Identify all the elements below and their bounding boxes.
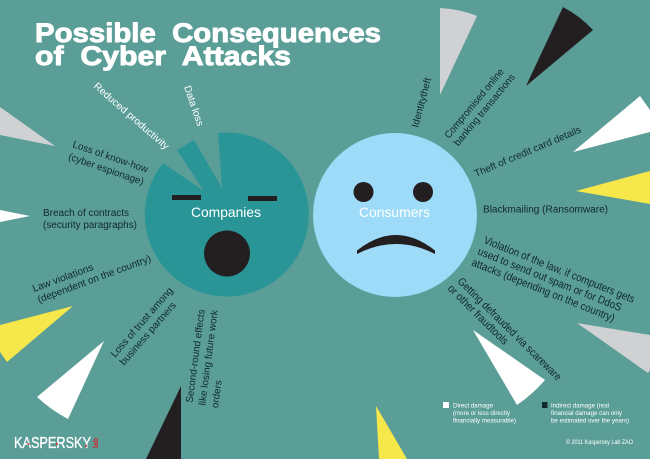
legend: indirect damage: Indirect damage (real: [551, 402, 609, 410]
label: violation of the law: used to send out spam or for DdoS: [476, 246, 623, 314]
label: loss of trust: Loss of trust among: [109, 286, 176, 360]
consumers label: Consumers: [359, 204, 430, 220]
label: breach of contracts: (security paragraphs): [43, 220, 137, 231]
logo: kaspersky lab: KASPERSKY: [14, 435, 91, 452]
label: loss of trust: business partners: [118, 300, 179, 368]
wedge: black top: [526, 7, 593, 86]
label: data loss: Data loss: [181, 84, 205, 128]
sad mouth: [357, 235, 435, 254]
open mouth: [204, 230, 250, 276]
panel: consumers face: [313, 133, 477, 297]
left eye: [354, 182, 374, 202]
legend: direct damage: financially measurable): [453, 418, 516, 424]
label: breach of contracts: [43, 208, 137, 231]
label: breach of contracts: Breach of contracts: [43, 208, 129, 219]
logo: kaspersky lab: lab: [93, 438, 100, 448]
label: reduced productivity: Reduced productivity: [91, 81, 171, 152]
wedge: white bottom-left: [37, 341, 104, 419]
consumers head: [313, 133, 477, 297]
label: violation of the law: attacks (depending on the country): [470, 257, 616, 325]
left eyebrow: [172, 195, 201, 200]
wedge: grey right: [577, 323, 650, 373]
legend: indirect damage: [542, 402, 629, 424]
label: law violations: Law violations: [31, 262, 95, 295]
wedge: yellow bottom: [376, 406, 407, 459]
wedge: grey top-left: [0, 107, 55, 146]
legend: direct damage: Direct damage: [453, 402, 494, 410]
label: second-round effects: Second-round effects: [185, 309, 208, 403]
wedge: yellow right: [576, 171, 650, 204]
label: blackmailing: Blackmailing (Ransomware): [483, 204, 608, 216]
label: second-round effects: [184, 307, 234, 409]
label: loss of know-how: (cyber espionage): [67, 152, 145, 188]
wedge: black bottom: [146, 386, 181, 459]
copyright: © 2011 Kaspersky Lab ZAO: [566, 439, 633, 446]
label: second-round effects: orders: [210, 380, 225, 409]
legend: indirect damage: financial damage can only: [551, 410, 623, 417]
title: Possible Consequences: [35, 18, 381, 48]
legend: indirect damage: be estimated over the years): [551, 418, 629, 424]
label: compromised online banking: banking transactions: [452, 72, 518, 149]
label: identity theft: Identitytheft: [410, 76, 434, 129]
wedge: white lower right: [473, 330, 545, 405]
wedge: white left: [0, 210, 30, 222]
wedge: yellow left: [0, 306, 73, 362]
label: loss of know-how: Loss of know-how: [71, 139, 150, 176]
wedge: white right: [573, 96, 650, 152]
label: getting defrauded: Getting defrauded via scareware: [455, 276, 564, 383]
title: of Cyber Attacks: [35, 41, 291, 71]
title: [35, 18, 381, 71]
companies label: Companies: [191, 204, 261, 220]
label: law violations: (dependent on the country): [36, 254, 153, 306]
right eye: [413, 182, 433, 202]
legend: direct damage: [443, 402, 516, 424]
label: theft of credit card: Theft of credit card details: [473, 125, 583, 180]
panel: companies face: [145, 133, 309, 297]
label: second-round effects: like losing future work: [197, 308, 221, 406]
right eyebrow: [248, 196, 277, 201]
label: violation of the law: Violation of the law, if computers gets: [482, 235, 637, 306]
legend: direct damage: (more or less directly: [453, 410, 511, 417]
label: compromised online banking: Compromised online: [443, 66, 507, 141]
label: getting defrauded: or other fraudtools: [445, 283, 511, 348]
wedge: grey top: [440, 8, 477, 95]
companies head with torn wedges: [145, 133, 309, 297]
